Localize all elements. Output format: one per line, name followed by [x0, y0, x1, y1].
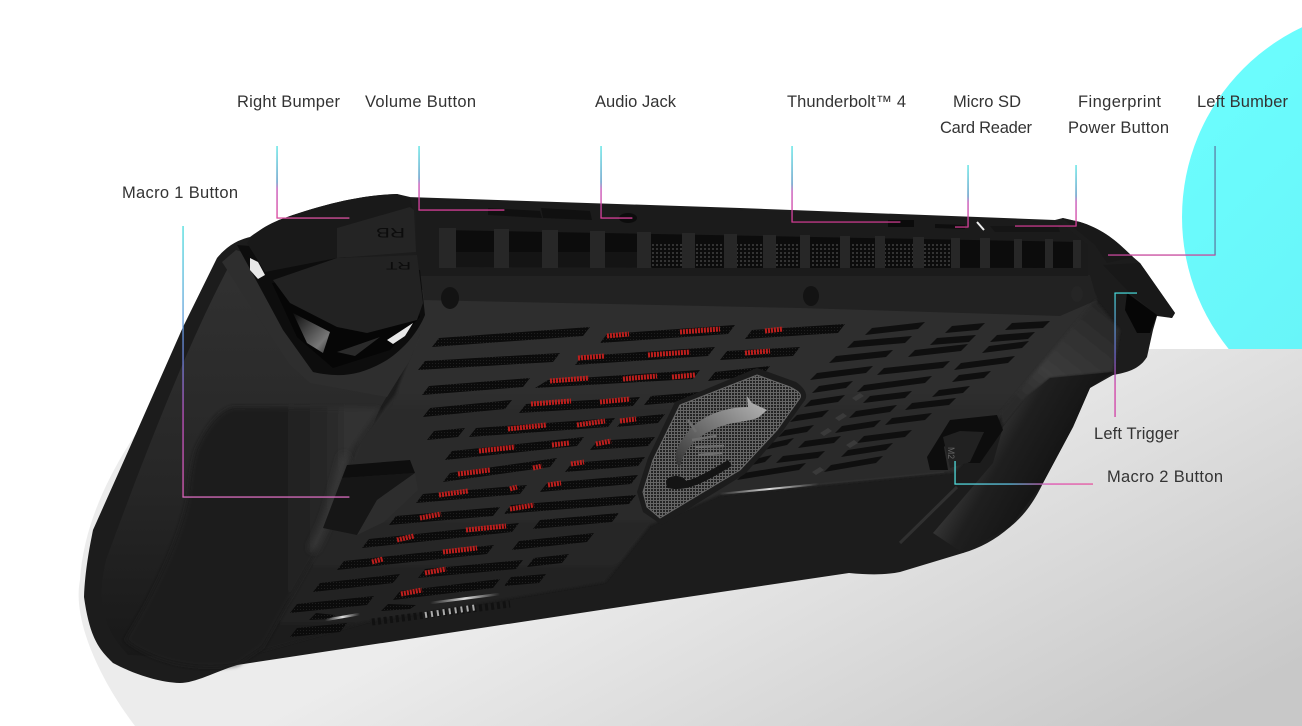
left grip pad	[125, 407, 380, 667]
label: Macro 1 Button: Macro 1 Button	[122, 184, 238, 202]
dragon body	[676, 396, 767, 468]
cyan circle	[1182, 27, 1302, 349]
speaker grille	[325, 594, 510, 622]
vent lower mesh	[440, 252, 650, 267]
band below vents	[418, 272, 1097, 316]
shield frame	[637, 368, 806, 525]
paddle top	[342, 460, 415, 478]
label: Micro SD Card Reader: Card Reader	[940, 119, 1032, 137]
label: Fingerprint Power Button: Fingerprint	[1078, 93, 1161, 111]
lower panel edge	[820, 472, 944, 484]
label: Fingerprint Power Button	[1068, 93, 1169, 137]
label: Thunderbolt 4: Thunderbolt™ 4	[787, 93, 906, 111]
top edge ports	[488, 208, 1060, 232]
dragon tail	[667, 463, 730, 486]
leader: Left Bumber	[1108, 146, 1216, 256]
label: Micro SD Card Reader: Micro SD	[953, 93, 1021, 111]
left cooling slats	[290, 324, 845, 637]
fingerprint power button	[990, 226, 1060, 232]
glossy trigger base	[272, 280, 420, 368]
back panel	[259, 276, 1097, 652]
leader: Volume Button	[418, 146, 504, 211]
vent mesh	[652, 243, 957, 268]
label: Micro SD Card Reader	[940, 93, 1032, 137]
grip upper band	[1000, 300, 1120, 427]
trigger cap	[1103, 263, 1175, 318]
top edge strip	[416, 199, 1088, 276]
shield emblem	[637, 368, 806, 525]
grey background shape	[79, 349, 1302, 726]
label: Right Bumper: Right Bumper	[237, 93, 340, 111]
trigger collar	[222, 245, 425, 397]
top vent row	[439, 228, 1081, 268]
gloss lower facet	[337, 337, 380, 356]
slat diamonds	[812, 393, 864, 475]
grille highlight	[425, 607, 478, 615]
screws	[441, 286, 1083, 309]
paddle rim	[927, 415, 1003, 470]
leader: Right Bumper	[276, 146, 349, 219]
micro sd reader	[935, 224, 965, 229]
vent openings	[440, 230, 1080, 268]
leader: Macro 1 Button	[182, 226, 349, 498]
leader: Macro 2 Button	[954, 461, 1093, 485]
paddle face	[943, 431, 984, 468]
right cooling slats	[737, 321, 1050, 480]
trigger body	[273, 255, 423, 333]
bumper body	[247, 194, 415, 272]
device	[84, 194, 1175, 683]
label: Macro 2 Button: Macro 2 Button	[1107, 468, 1223, 486]
white highlights	[250, 258, 413, 344]
label: Audio Jack: Audio Jack	[595, 93, 677, 111]
leader: Left Trigger	[1114, 292, 1137, 417]
leader: Thunderbolt 4	[791, 146, 900, 223]
audio jack	[619, 213, 637, 223]
RT mark: RT	[386, 259, 411, 271]
collar light band	[222, 250, 425, 397]
label: Fingerprint Power Button: Power Button	[1068, 119, 1169, 137]
paddle edge	[357, 473, 418, 535]
label: Volume Button: Volume Button	[365, 93, 476, 111]
volume button	[488, 208, 592, 220]
left bumper	[1062, 218, 1133, 263]
right bumper RB	[247, 194, 416, 272]
red glowing mesh	[372, 329, 783, 594]
grip lower pad	[933, 372, 1113, 553]
trigger gloss	[1125, 293, 1157, 333]
grip streak	[900, 487, 957, 543]
thunderbolt port	[888, 220, 914, 227]
vent pillars	[439, 228, 1081, 268]
label: Left Bumber: Left Bumber	[1197, 93, 1288, 111]
RB mark: RB	[376, 225, 405, 241]
paddle face	[323, 473, 415, 535]
left side inner face	[101, 268, 420, 660]
leader: Audio Jack	[600, 146, 632, 219]
shield mesh	[643, 375, 801, 518]
pad edge highlight	[312, 455, 345, 550]
gloss reflection	[293, 313, 330, 353]
dragon	[666, 396, 767, 488]
pad shape	[125, 407, 380, 667]
grille bars	[372, 604, 510, 622]
right trigger RT	[250, 255, 423, 368]
collar dark ring	[237, 245, 425, 375]
device body	[84, 194, 1175, 683]
left trigger	[1103, 263, 1175, 333]
label: Left Trigger: Left Trigger	[1094, 425, 1180, 443]
bumper front facet	[337, 207, 416, 258]
right grip	[900, 300, 1120, 553]
macro 2 paddle	[927, 415, 1003, 470]
macro 1 paddle	[323, 460, 418, 535]
M2 mark: M2	[946, 447, 956, 459]
dragon wing	[688, 420, 724, 455]
lower panel highlight	[719, 484, 820, 494]
status light	[977, 222, 984, 230]
leader: Fingerprint Power Button	[1015, 165, 1077, 227]
panel highlight	[430, 594, 500, 603]
leader: Micro SD	[955, 165, 969, 228]
